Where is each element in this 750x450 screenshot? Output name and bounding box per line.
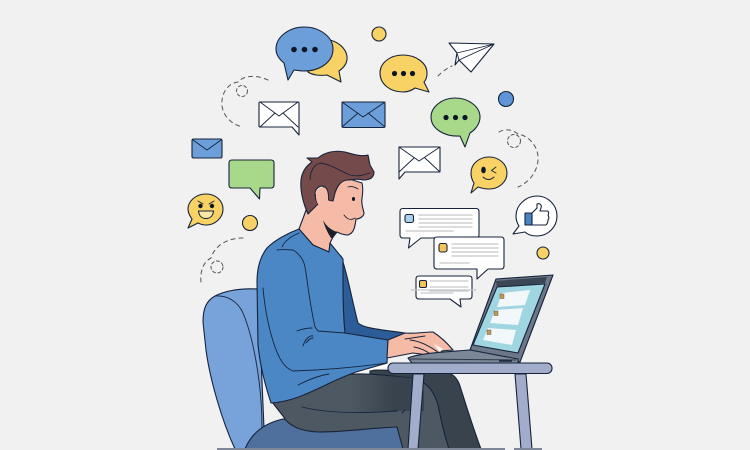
laptop [408,275,553,363]
icon: blue circle [498,92,514,106]
dashed path: lower left [201,238,243,282]
chat card 3 [411,276,476,307]
chair back [203,289,264,449]
icon: paper plane [449,43,494,72]
chair seat [245,419,404,449]
icon: white envelope right [399,147,440,179]
table leg right [515,374,532,449]
laptop base [408,350,518,363]
laptop bezel top [496,277,547,288]
far leg [370,370,481,449]
icon: green rectangle speech bubble [229,160,274,199]
person: blue sweater [257,229,388,403]
laptop lid [470,275,553,362]
icon: yellow and blue speech bubbles [276,27,347,82]
icon: blue envelope [342,102,385,128]
icon: small blue envelope [192,139,222,158]
icon: grinning emoji bubble [188,194,223,228]
person: hair [301,151,374,214]
dashed path: paper plane trail [438,66,452,76]
dashed path: right [499,130,538,187]
dashed path: top left [222,76,268,127]
screen row markers [487,294,504,334]
chat card 1 [400,208,479,248]
icon: yellow speech bubble [380,55,429,92]
screen rows [483,290,530,345]
icon: white envelope left [259,102,299,135]
floor line [217,448,542,450]
near leg [272,374,449,449]
table top [388,363,552,374]
laptop screen [473,284,545,353]
chat card 2 [434,237,504,279]
person: neck and face [299,176,364,252]
icon: green speech bubble [431,98,480,147]
table leg left [408,374,424,449]
icon: thumbs up bubble [513,196,557,236]
icon: yellow circle right [537,247,549,259]
icon: yellow circle top [372,27,386,41]
person: ear [316,187,331,210]
near hand on keyboard [387,332,453,358]
icon: winking emoji bubble [471,157,507,193]
icon: yellow circle left [242,216,258,230]
far arm sleeve [341,256,405,345]
shirt cuff [356,364,388,372]
